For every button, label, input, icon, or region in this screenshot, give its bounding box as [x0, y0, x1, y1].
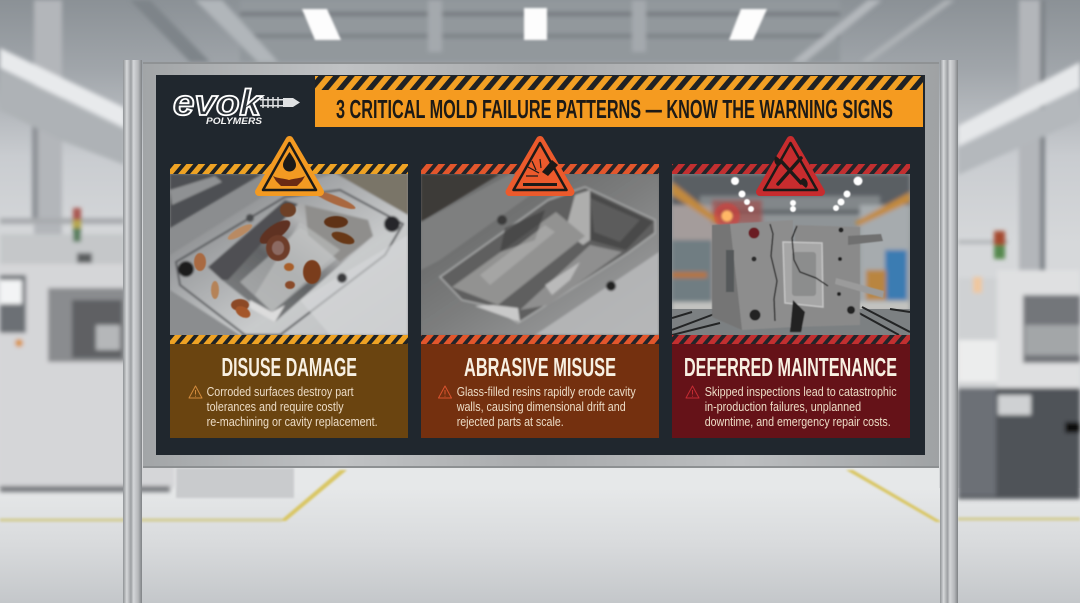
description: re-machining or cavity replacement.	[207, 414, 378, 429]
header hazard stripe	[315, 76, 923, 90]
warning icon	[438, 386, 452, 398]
floor	[0, 488, 1080, 603]
header banner	[315, 76, 923, 127]
support posts	[123, 60, 958, 603]
bottom hazard stripe red	[672, 335, 910, 344]
description: rejected parts at scale.	[457, 414, 564, 429]
logo: Evok Polymers: POLYMERS	[206, 116, 263, 127]
icon: tools warning triangle	[760, 140, 821, 192]
description: walls, causing dimensional drift and	[456, 399, 626, 414]
sign frame	[143, 62, 939, 468]
dark sign panel	[156, 75, 925, 455]
heading: DISUSE DAMAGE	[222, 354, 357, 382]
description	[705, 384, 897, 429]
left machine	[0, 208, 175, 492]
panel: disuse damage	[170, 164, 408, 438]
panel: deferred maintenance	[672, 164, 910, 438]
top hazard stripe red	[672, 164, 910, 174]
top hazard stripe orange	[421, 164, 659, 174]
photo: eroded cavity	[421, 174, 659, 335]
description: in-production failures, unplanned	[705, 399, 861, 414]
logo: Evok Polymers: evok	[173, 82, 263, 123]
panel: abrasive misuse	[421, 164, 659, 438]
logo: Evok Polymers	[173, 82, 300, 127]
warning icon	[189, 386, 202, 398]
icon: oil drop warning triangle	[259, 140, 320, 192]
description: Skipped inspections lead to catastrophic	[705, 384, 897, 399]
right machine	[958, 231, 1080, 499]
red beacon	[714, 203, 740, 229]
bottom hazard stripe amber	[170, 335, 408, 344]
heading: DEFERRED MAINTENANCE	[684, 354, 897, 382]
description	[456, 384, 636, 429]
text box maroon	[672, 344, 910, 438]
description: Glass-filled resins rapidly erode cavity	[457, 384, 636, 399]
photo: corroded mold	[170, 173, 408, 335]
text box rust	[421, 344, 659, 438]
photo: cracked mold in factory	[672, 174, 910, 335]
warning icon	[686, 386, 699, 398]
icon: abrasive spark warning triangle	[510, 140, 570, 192]
description: Corroded surfaces destroy part	[207, 384, 354, 399]
description: tolerances and require costly	[207, 399, 344, 414]
heading: ABRASIVE MISUSE	[464, 354, 616, 382]
bottom hazard stripe orange	[421, 335, 659, 344]
ceiling lights	[302, 8, 767, 40]
description: downtime, and emergency repair costs.	[705, 414, 891, 429]
text box amber	[170, 344, 408, 438]
description	[207, 384, 378, 429]
floor rails	[672, 309, 910, 335]
top hazard stripe amber	[170, 164, 408, 174]
